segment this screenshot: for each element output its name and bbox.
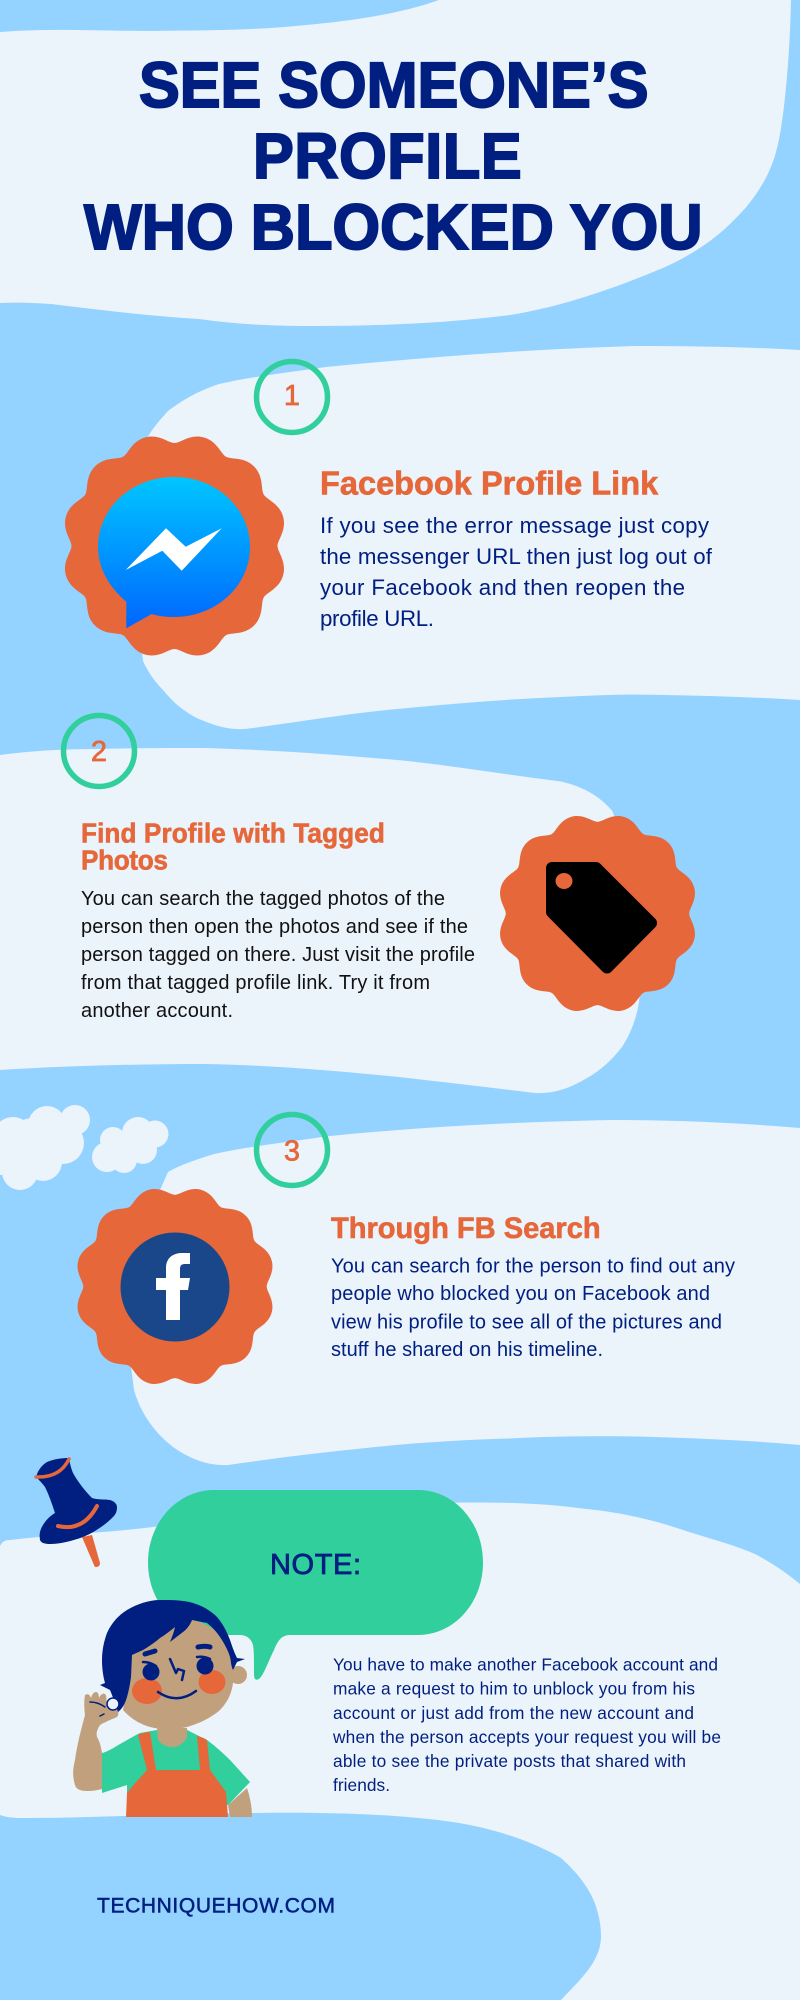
panel: step 2 background (0, 748, 650, 1093)
step 2 text (81, 888, 475, 1022)
step 3 number circle: 3 (284, 1136, 300, 1168)
step 3 number circle (256, 1114, 328, 1186)
step 3 text (331, 1256, 735, 1361)
character apron (126, 1732, 228, 1817)
title (84, 50, 703, 263)
title: PROFILE (253, 121, 522, 192)
character illustration (73, 1600, 252, 1817)
step 1 text: profile URL. (320, 606, 434, 631)
character right arm (228, 1788, 252, 1817)
character hair (100, 1600, 245, 1712)
step 2 number circle (64, 716, 134, 786)
step 2 text: person then open the photos and see if the (81, 916, 468, 938)
icon: tag badge (495, 811, 700, 1016)
character neck (157, 1728, 187, 1747)
step 3 heading: Through FB Search (331, 1212, 601, 1245)
step 2 text: You can search the tagged photos of the (81, 888, 445, 910)
step 3 text: people who blocked you on Facebook and (331, 1283, 710, 1305)
character shirt (102, 1730, 250, 1805)
note text: make a request to him to unblock you from his (333, 1679, 695, 1699)
panel: step 3 background (120, 1120, 800, 1465)
icon: push pin (36, 1458, 117, 1567)
note text: able to see the private posts that shared with (333, 1751, 686, 1771)
icon: facebook badge (72, 1184, 278, 1389)
step 1 text: If you see the error message just copy (320, 513, 710, 538)
step 1 text: your Facebook and then reopen the (320, 575, 685, 600)
step 2 text: from that tagged profile link. Try it from (81, 972, 430, 994)
step 3 text: view his profile to see all of the pictures and (331, 1311, 722, 1333)
icon: messenger badge (59, 430, 290, 662)
step 1 text (320, 513, 713, 631)
title: SEE SOMEONE’S (139, 50, 649, 121)
step 2 text: another account. (81, 1000, 233, 1022)
title panel (0, 0, 791, 326)
step 1 number circle: 1 (284, 380, 300, 412)
note text: friends. (333, 1775, 390, 1795)
note text (332, 1655, 721, 1795)
clouds (0, 1105, 168, 1190)
step 3 text: stuff he shared on his timeline. (331, 1339, 603, 1361)
footer website: TECHNIQUEHOW.COM (97, 1895, 335, 1918)
panel: note background (0, 1502, 800, 2000)
character fingers ring (90, 1698, 119, 1716)
character face (123, 1620, 247, 1729)
panel: footer blob (0, 1813, 601, 2000)
step 1 text: the messenger URL then just log out of (320, 544, 713, 569)
note text: You have to make another Facebook account and (333, 1655, 718, 1675)
step 1 number circle (256, 362, 328, 432)
step 3 text: You can search for the person to find out any (331, 1256, 735, 1278)
speech bubble (148, 1490, 483, 1680)
step 2 heading: Photos (81, 844, 168, 876)
character raised arm and hand (73, 1692, 118, 1791)
title: WHO BLOCKED YOU (84, 192, 703, 263)
step 2 number circle: 2 (91, 736, 107, 768)
note heading: NOTE: (270, 1549, 361, 1581)
note text: when the person accepts your request you will be (332, 1727, 721, 1747)
note text: account or just add from the new account and (333, 1703, 694, 1723)
step 2 heading: Find Profile with Tagged (81, 817, 385, 849)
step 1 heading: Facebook Profile Link (320, 464, 659, 502)
step 2 text: person tagged on there. Just visit the profile (81, 944, 475, 966)
step 2 heading (81, 817, 385, 876)
panel: step 1 background (130, 346, 800, 729)
